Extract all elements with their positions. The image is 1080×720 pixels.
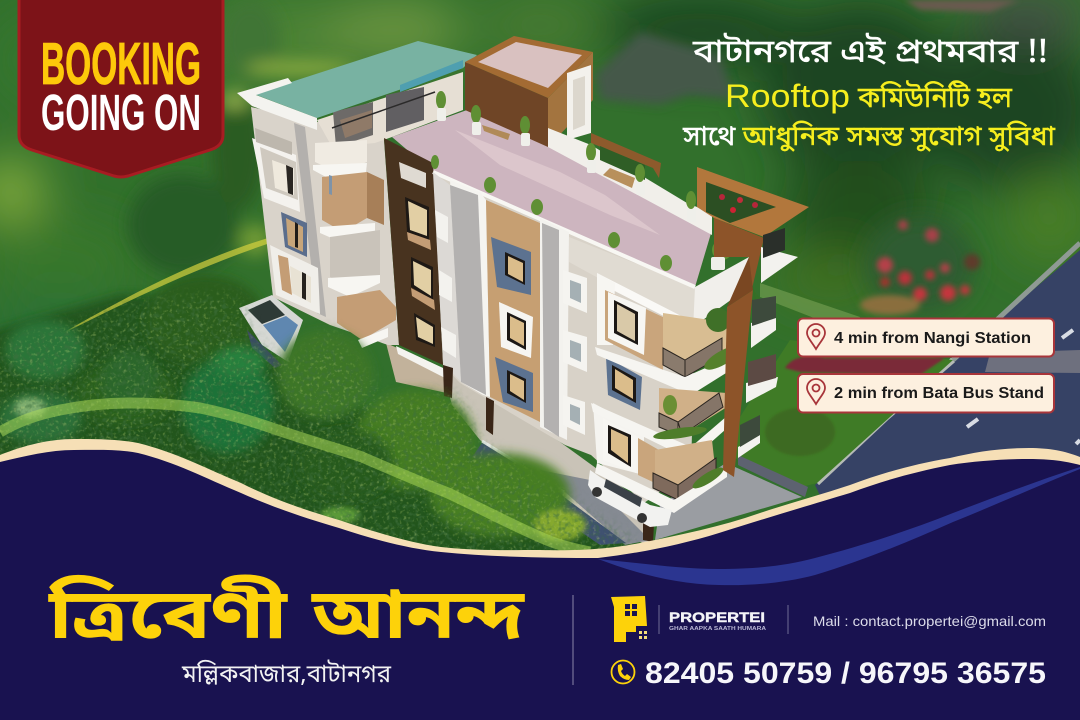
headline top right xyxy=(682,33,1056,157)
location pill: Bata Bus Stand xyxy=(798,374,1054,412)
left cream wall behind terrace xyxy=(317,72,463,147)
right lawn xyxy=(735,340,953,490)
pink rooftop deck xyxy=(392,110,712,287)
icon: map pin xyxy=(807,379,825,404)
banner line two: GOING ON xyxy=(41,84,201,141)
pill text: 2 min from Bata Bus Stand xyxy=(834,385,1044,402)
red hedge xyxy=(785,356,945,375)
brand text: GHAR AAPKA SAATH HUMARA xyxy=(669,626,766,632)
green tile roof xyxy=(254,41,477,118)
email: Mail : contact.propertei@gmail.com xyxy=(813,613,1046,629)
flowering bush xyxy=(860,215,980,315)
headline line two latin: Rooftop xyxy=(725,78,850,114)
small facade windows xyxy=(435,210,587,435)
left bay parapet xyxy=(315,140,367,173)
green translucent curve xyxy=(0,403,590,552)
corner pergola with flowers xyxy=(697,167,809,237)
balcony one xyxy=(595,308,743,395)
title word two: আনন্দ xyxy=(311,574,525,667)
roof edge xyxy=(433,172,695,287)
small pergola xyxy=(591,133,661,188)
balcony three xyxy=(595,440,727,513)
lime light streak upper xyxy=(52,238,270,339)
left wing walls xyxy=(251,107,399,345)
headline line three: সাথে আধুনিক সমস্ত সুযোগ সুবিধা xyxy=(682,120,1056,157)
banner line one: BOOKING xyxy=(41,31,201,97)
blurred house behind xyxy=(595,32,735,105)
headline line one: বাটানগরে এই প্রথমবার !! xyxy=(692,33,1048,76)
road with fence xyxy=(760,243,1080,560)
icon: map pin xyxy=(807,324,825,349)
driveway and ground xyxy=(386,343,808,545)
white car xyxy=(588,470,672,527)
wood stair block xyxy=(465,36,593,147)
pill text: 4 min from Nangi Station xyxy=(834,330,1031,347)
cream wave outline xyxy=(0,439,1080,720)
foreground trees xyxy=(0,289,632,550)
left upper window xyxy=(252,138,300,212)
columns at ground xyxy=(443,365,655,542)
dark brown column xyxy=(384,138,443,365)
navy footer panel xyxy=(0,450,1080,720)
blurred trees left xyxy=(128,0,355,275)
shrubs by lawn xyxy=(765,408,835,456)
blue accent swoosh xyxy=(598,467,1080,585)
location pill: Nangi Station xyxy=(798,318,1054,356)
phone numbers: 82405 50759 / 96795 36575 xyxy=(645,657,1046,690)
white pots xyxy=(437,108,725,270)
right side balconies xyxy=(738,228,798,458)
right upper window bay xyxy=(597,273,665,410)
building xyxy=(237,36,809,542)
icon: phone xyxy=(612,660,634,684)
terrace glass lounge xyxy=(332,87,435,147)
centre windows xyxy=(491,237,533,412)
main facade wall xyxy=(433,172,695,503)
headline line two bengali: কমিউনিটি হল xyxy=(857,80,1013,119)
rooftop plants xyxy=(431,91,732,271)
wood column right xyxy=(714,218,764,477)
icon: propertei logo xyxy=(611,596,647,642)
left lower window xyxy=(270,245,320,314)
left jali panel xyxy=(294,123,326,317)
project title xyxy=(48,574,525,667)
bench xyxy=(482,125,510,140)
brand text xyxy=(669,609,766,632)
lower right window bay xyxy=(593,403,659,483)
left bay bands xyxy=(313,163,396,348)
brand text: PROPERTEI xyxy=(669,609,765,625)
upper front wall xyxy=(597,257,749,327)
facade left strip and jali xyxy=(433,172,569,440)
project location: মল্লিকবাজার,বাটানগর xyxy=(181,659,392,693)
left blue window xyxy=(281,212,307,257)
booking banner xyxy=(19,0,223,177)
foliage base lower left xyxy=(0,275,640,720)
vertical divider main xyxy=(572,595,574,685)
balcony two xyxy=(591,388,734,460)
title word one: ত্রিবেণী xyxy=(48,574,288,667)
roof parapet right xyxy=(548,128,712,235)
pool ramp xyxy=(239,295,303,368)
